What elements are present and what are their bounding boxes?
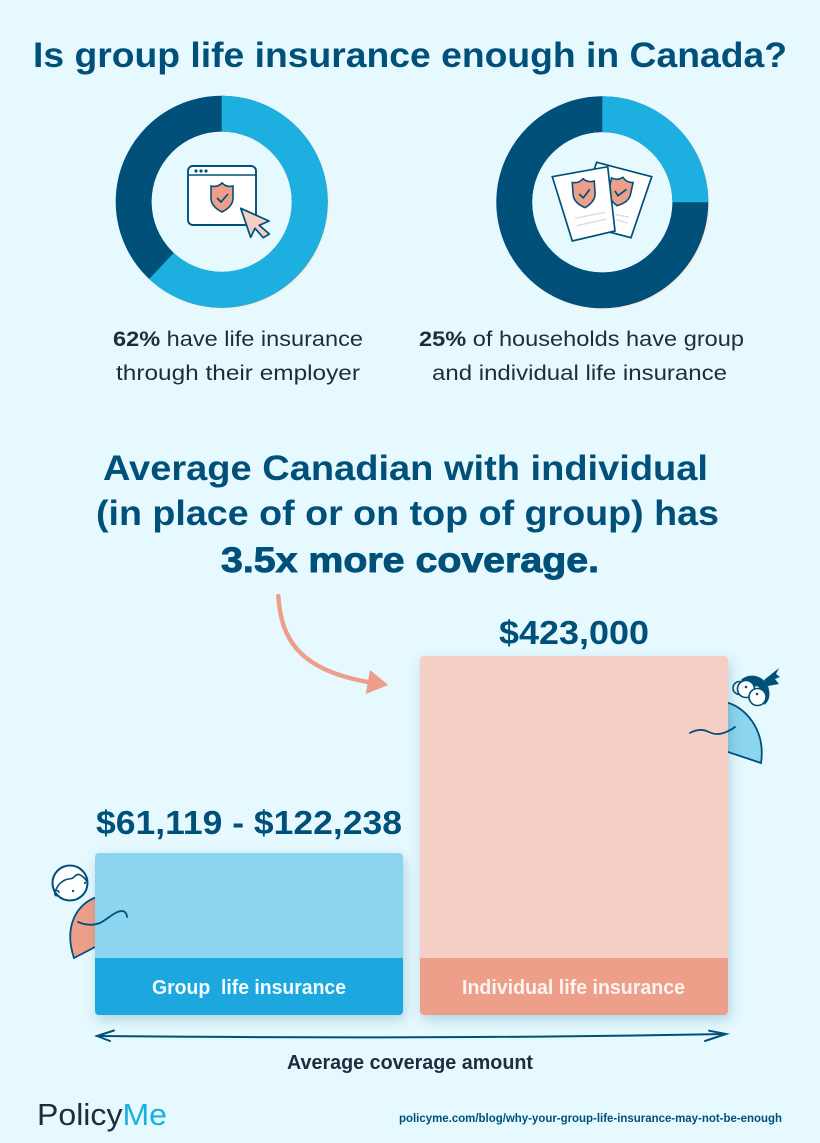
bar: individual coverage amount <box>420 656 728 1015</box>
panel: group and individual statistic <box>419 98 744 385</box>
bar label: individual: Individual life insurance <box>462 977 685 999</box>
caption: 62%: through their employer <box>116 361 360 385</box>
figure head and hair <box>52 866 88 900</box>
bar: group life insurance <box>95 804 403 1015</box>
source url: policyme.com/blog/why-your-group-life-insurance-may-not-be-enough <box>399 1113 782 1125</box>
arrow: coverage axis <box>97 1030 726 1041</box>
value: group range: $61,119 - $122,238 <box>96 804 402 841</box>
figure: person behind group bar <box>52 866 97 958</box>
figure: person behind individual bar <box>725 668 780 763</box>
logo: PolicyMe: PolicyMe <box>37 1097 167 1132</box>
figure head and hair <box>733 668 780 706</box>
caption: 25% <box>419 327 744 385</box>
arrow: heading to individual bar <box>278 596 388 694</box>
arm: group figure <box>78 911 127 925</box>
panel: employer life insurance statistic <box>113 97 363 385</box>
arm: individual figure <box>690 727 735 734</box>
caption: 25%: and individual life insurance <box>432 361 727 385</box>
heading: coverage comparison: 3.5x more coverage. <box>221 541 599 580</box>
icon: browser window with shield and cursor <box>188 166 269 238</box>
figure body <box>70 897 97 958</box>
heading: coverage comparison: Average Canadian with individual <box>103 449 708 488</box>
caption: 25%: 25% of households have group <box>419 327 744 351</box>
bar: individual life insurance <box>420 614 728 1015</box>
value: individual amount: $423,000 <box>499 614 649 651</box>
bar label: group: Group life insurance <box>152 977 346 999</box>
axis label: Average coverage amount <box>287 1052 533 1074</box>
heading: coverage comparison: (in place of or on top of group) has <box>96 494 719 533</box>
caption: 62%: 62% have life insurance <box>113 327 363 351</box>
icon: two policy documents <box>552 162 652 241</box>
bar: group coverage amount <box>95 853 403 1015</box>
donut chart: 25% <box>498 98 710 310</box>
heading: coverage comparison <box>96 449 719 580</box>
caption: 62% <box>113 327 363 385</box>
donut chart: 62% <box>117 97 329 309</box>
title: Is group life insurance enough in Canada? <box>33 36 787 75</box>
figure body <box>725 702 762 763</box>
